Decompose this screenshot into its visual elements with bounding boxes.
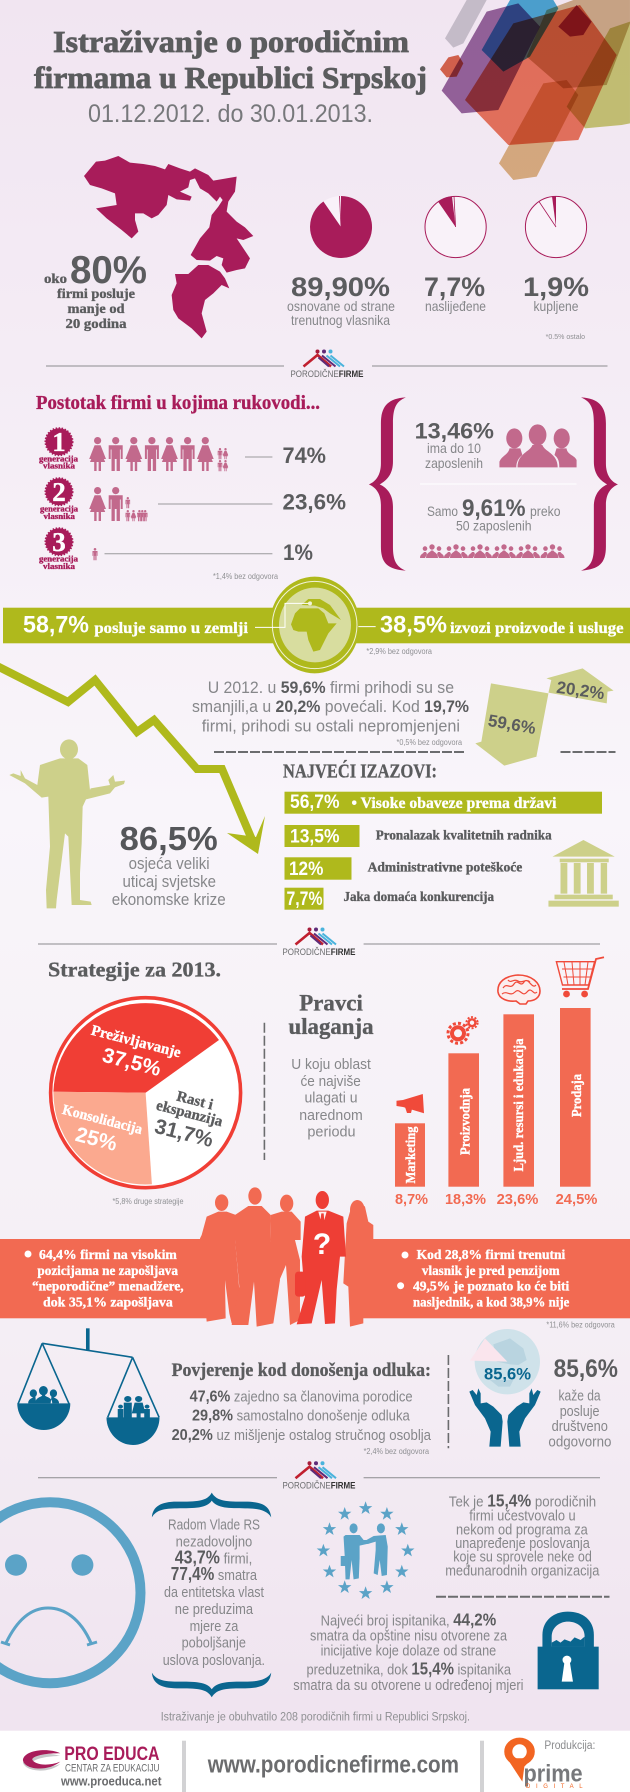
- title: [34, 24, 427, 128]
- icon: scales: [17, 1328, 160, 1445]
- pie chart: strategies: Rast i: [175, 1089, 215, 1113]
- footer panel: [0, 1731, 630, 1792]
- decorative colored cubes: [440, 0, 630, 180]
- text: government satisfaction: poboljšanje: [182, 1635, 246, 1652]
- logo: Pro Educa: www.proeduca.net: [60, 1775, 162, 1789]
- stat: 86,5% crisis impact: 86,5%: [120, 820, 218, 857]
- text: government satisfaction: da entitetska vlast: [164, 1584, 265, 1601]
- text: investment directions: [288, 991, 374, 1141]
- logo: Prime Digital: DIGITAL: [526, 1784, 583, 1790]
- stat: 80% under 20 years: firmi posluje: [57, 287, 135, 302]
- pie chart: strategies: 37,5%: [100, 1044, 164, 1081]
- logo: Prime Digital: prime: [524, 1761, 583, 1788]
- text: investment directions: će najviše: [300, 1073, 361, 1090]
- curly brace: bottom: [152, 1673, 271, 1697]
- divider with logo 3: PORODIČNEFIRME: [282, 1481, 356, 1492]
- pie chart: strategies: [51, 998, 241, 1188]
- text: investment directions: narednom: [299, 1107, 363, 1124]
- row: second generation: generacija: [40, 504, 79, 514]
- band: domestic vs export: izvozi proizvode i usluge: [450, 620, 624, 637]
- text: municipalities openness: inicijative koje dolaze od strane: [321, 1643, 496, 1660]
- bar: 13,5%: [284, 825, 552, 848]
- bar: Proizvodnja: Proizvodnja: [458, 1088, 474, 1155]
- text: municipalities openness: [293, 1610, 524, 1694]
- stat: 13,46% up to 10 employees: ima do 10: [427, 440, 481, 456]
- text: government satisfaction: ne preduzima: [175, 1601, 254, 1618]
- bar: Proizvodnja: [445, 1053, 486, 1208]
- row: third generation: 1%: [283, 540, 313, 565]
- text: owner retirement and successor: nasljednik, a kod 38,9% nije: [413, 1296, 569, 1311]
- row: third generation: 3: [52, 527, 66, 557]
- band: domestic vs export: 38,5%: [380, 612, 447, 639]
- website URL: www.porodicnefirme.com: [207, 1752, 459, 1779]
- icon: shopping cart: [556, 957, 604, 997]
- text: trust in decision making: 20,2% uz mišljenje ostalog stručnog osoblja: [172, 1427, 432, 1444]
- footnote: no answer 11,6%: *11,6% bez odgovora: [546, 1320, 615, 1329]
- pie chart: strategies: Konsolidacija: [61, 1102, 145, 1138]
- bar: 13,5%: 13,5%: [290, 827, 340, 848]
- stat: 9,61% over 50 employees: Samo: [427, 503, 458, 519]
- text: non-family managers: 64,4% firmi na visokim: [39, 1248, 177, 1263]
- text: investment directions: U koju oblast: [291, 1056, 372, 1073]
- divider with logo 3: [38, 1461, 600, 1492]
- pie: 7,7%: naslijeđene: [425, 298, 486, 314]
- bar: Prodaja: Prodaja: [570, 1074, 585, 1117]
- icon: padlock: [538, 1612, 599, 1689]
- text: survey scope: Istraživanje je obuhvatilo 208 porodičnih firmi u Republici Srpskoj.: [161, 1712, 470, 1724]
- stat: 85,6% socially responsible: [548, 1355, 618, 1451]
- text: investment directions: ulagati u: [304, 1090, 358, 1107]
- arrow: falling trend line: [0, 666, 265, 854]
- row: first generation: vlasnika: [43, 461, 76, 471]
- pie: 89,90%: [287, 196, 395, 328]
- text: international programs: međunarodnih organizacija: [445, 1562, 600, 1579]
- pie: 89,90%: osnovane od strane: [287, 298, 395, 314]
- text: revenue change: U 2012. u 59,6% firmi prihodi su se: [208, 678, 454, 697]
- text: trust in decision making: Povjerenje kod donošenja odluka:: [172, 1360, 431, 1381]
- text: owner retirement and successor: 49,5% je poznato ko će biti: [413, 1280, 569, 1295]
- arrows: revenue down and up: 59,6%: [487, 711, 537, 738]
- logo: Pro Educa: CENTAR ZA EDUKACIJU: [65, 1763, 160, 1775]
- text: government satisfaction: mjere za: [190, 1618, 239, 1635]
- text: revenue change: [192, 678, 469, 747]
- text: international programs: unapređenje poslovanja: [455, 1535, 590, 1552]
- band: domestic vs export: [3, 608, 630, 643]
- pie: 1,9%: kupljene: [534, 298, 579, 314]
- divider with logo 1: [46, 350, 608, 380]
- silhouettes: group of people: [200, 1187, 373, 1327]
- curly brace: top: [152, 1493, 271, 1517]
- text: investment directions: ulaganja: [288, 1014, 374, 1039]
- map of Republika Srpska: [84, 156, 253, 338]
- logo: Pro Educa: PRO EDUCA: [64, 1744, 160, 1765]
- text: trust in decision making: *2,4% bez odgovora: [364, 1447, 429, 1456]
- row: second generation: vlasnika: [44, 511, 76, 521]
- band: domestic vs export: posluje samo u zemlji: [94, 620, 249, 637]
- icon: EU stars and handshake: [317, 1501, 414, 1599]
- silhouette: man shrugging: [9, 739, 125, 908]
- footnote: other strategies: *5,8% druge strategije: [112, 1197, 184, 1206]
- divider with logo 2: [38, 928, 600, 958]
- pie chart: strategies: 31,7%: [152, 1115, 216, 1152]
- footnote: other: *0.5% ostalo: [546, 332, 585, 341]
- pie: 89,90%: 89,90%: [291, 272, 390, 302]
- stat: 13,46% up to 10 employees: 13,46%: [415, 418, 494, 443]
- text: government satisfaction: Radom Vlade RS: [168, 1516, 260, 1533]
- icon: globe badge: [255, 577, 376, 673]
- icon: megaphone: [396, 1094, 424, 1113]
- stat: 13,46% up to 10 employees: [415, 418, 494, 471]
- arrows: revenue down and up: [475, 668, 614, 766]
- text: government satisfaction: uslova poslovanja.: [163, 1652, 265, 1669]
- row: second generation: 23,6%: [282, 489, 346, 514]
- logo: Pro Educa: [23, 1744, 162, 1789]
- stat: 9,61% over 50 employees: [427, 495, 561, 534]
- text: revenue change: firmi, prihodi su ostali nepromjenjeni: [202, 717, 460, 736]
- text: non-family managers: “neporodične” menadžere,: [32, 1280, 184, 1295]
- text: investment directions: Pravci: [299, 991, 363, 1016]
- text: international programs: [445, 1491, 600, 1579]
- stat: 86,5% crisis impact: osjeća veliki: [129, 854, 210, 873]
- title: Istraživanje o porodičnim: [53, 24, 409, 59]
- bar: 7,7%: 7,7%: [286, 889, 323, 910]
- stat: 80% under 20 years: oko: [44, 272, 67, 287]
- bar: 12%: 12%: [289, 859, 323, 880]
- text: owner retirement and successor: [397, 1248, 569, 1311]
- icon: brain: [498, 975, 540, 1004]
- row: first generation: generacija: [39, 454, 79, 464]
- bar: Prodaja: 24,5%: [556, 1191, 597, 1208]
- stat: 80% under 20 years: 80%: [70, 249, 147, 292]
- text: municipalities openness: Najveći broj ispitanika, 44,2%: [321, 1610, 497, 1630]
- stat: 9,61% over 50 employees: preko: [530, 503, 561, 519]
- bar: Ljud. resursi i edukacija: [497, 1014, 538, 1208]
- logo: Prime Digital: Produkcija:: [544, 1740, 595, 1752]
- text: non-family managers: dok 35,1% zapošljava: [43, 1296, 173, 1311]
- bar: Proizvodnja: 18,3%: [445, 1191, 486, 1208]
- bar: 7,7%: [284, 888, 494, 910]
- arrows: revenue down and up: 20,2%: [555, 678, 606, 703]
- text: municipalities openness: smatra da su otvorene u određenoj mjeri: [293, 1677, 524, 1694]
- text: government satisfaction: 77,4% smatra: [171, 1564, 258, 1584]
- row: second generation: 2: [52, 477, 66, 507]
- text: government satisfaction: 43,7% firmi,: [175, 1547, 252, 1567]
- icon: row of small people: [420, 544, 564, 558]
- text: international programs: firmi učestvovalo u: [469, 1508, 576, 1525]
- text: non-family managers: [24, 1248, 184, 1311]
- stat: 13,46% up to 10 employees: zaposlenih: [425, 455, 483, 471]
- bar: 12%: [284, 857, 522, 880]
- band: management and succession: [0, 1239, 630, 1318]
- stat: 80% under 20 years: 20 godina: [66, 317, 126, 332]
- title: 01.12.2012. do 30.01.2013.: [88, 100, 373, 128]
- footnote: no answer 2,9%: *2,9% bez odgovora: [366, 647, 432, 656]
- logo: Prime Digital: [507, 1740, 595, 1790]
- text: revenue change: smanjili,a u 20,2% povećali. Kod 19,7%: [192, 697, 469, 716]
- stat: 85,6% socially responsible: posluje: [560, 1403, 600, 1420]
- pie chart: strategies: Preživljavanje: [89, 1023, 183, 1061]
- icon: government building: [548, 840, 619, 907]
- row: first generation: 1: [52, 427, 66, 457]
- text: trust in decision making: [172, 1360, 432, 1456]
- pie: 7,7%: [424, 196, 486, 314]
- band: domestic vs export: 58,7%: [23, 612, 89, 639]
- divider with logo 1: PORODIČNEFIRME: [290, 369, 364, 380]
- stat: 86,5% crisis impact: uticaj svjetske: [122, 872, 216, 891]
- stat: 86,5% crisis impact: ekonomske krize: [112, 890, 226, 909]
- bar: 7,7%: Jaka domaća konkurencija: [344, 890, 494, 905]
- row: third generation: generacija: [39, 554, 79, 564]
- curly braces: [369, 397, 618, 571]
- stat: 85,6% socially responsible: odgovorno: [548, 1434, 612, 1451]
- stat: 9,61% over 50 employees: 9,61%: [462, 495, 526, 522]
- stat: 85,6% socially responsible: društveno: [552, 1418, 608, 1435]
- stat: 9,61% over 50 employees: 50 zaposlenih: [456, 518, 532, 534]
- heading: strategies: Strategije za 2013.: [48, 958, 221, 982]
- icon: three people: [499, 424, 577, 467]
- text: owner retirement and successor: vlasnik je pred penzijom: [422, 1264, 560, 1279]
- stat: 80% under 20 years: [44, 249, 147, 332]
- text: international programs: nekom od programa za: [456, 1521, 588, 1538]
- bar: Marketing: Marketing: [404, 1126, 419, 1184]
- bar: 56,7%: 56,7%: [290, 792, 340, 813]
- text: trust in decision making: 47,6% zajedno sa članovima porodice: [190, 1389, 413, 1406]
- bar: Marketing: [395, 1123, 428, 1208]
- bar: Marketing: 8,7%: [395, 1191, 428, 1208]
- bar: 56,7%: [284, 792, 602, 814]
- pie chart: strategies: ekspanzija: [154, 1098, 225, 1130]
- text: investment directions: periodu: [307, 1124, 356, 1141]
- pie: 7,7%: 7,7%: [424, 272, 485, 302]
- pie: 89,90%: trenutnog vlasnika: [291, 312, 390, 328]
- text: international programs: koje su sprovele neke od: [453, 1549, 592, 1566]
- pie: 1,9%: 1,9%: [523, 272, 589, 302]
- bar: Ljud. resursi i edukacija: Ljud. resursi i edukacija: [512, 1038, 527, 1172]
- heading: leadership by generation: Postotak firmi u kojima rukovodi...: [36, 392, 320, 414]
- text: owner retirement and successor: Kod 28,8% firmi trenutni: [417, 1248, 565, 1263]
- pie: 1,9%: [523, 196, 589, 314]
- row: third generation: [39, 527, 313, 571]
- row: third generation: vlasnika: [43, 561, 76, 571]
- bar: 12%: Administrativne poteškoće: [368, 861, 522, 876]
- icon: sad face: [0, 1502, 140, 1683]
- stat: 80% under 20 years: manje od: [68, 302, 125, 317]
- text: municipalities openness: smatra da opštine nisu otvorene za: [310, 1628, 508, 1645]
- bar: Prodaja: [556, 1008, 597, 1208]
- text: government satisfaction: [163, 1516, 265, 1669]
- text: trust in decision making: 29,8% samostalno donošenje odluka: [192, 1408, 411, 1425]
- row: first generation: 74%: [282, 443, 326, 468]
- stat: 85,6% socially responsible: 85,6%: [554, 1355, 618, 1383]
- icon: globe pie in hands: 85,6%: [484, 1364, 531, 1383]
- heading: biggest challenges: NAJVEĆI IZAZOVI:: [283, 759, 437, 783]
- icon: globe pie in hands: [469, 1329, 541, 1447]
- text: non-family managers: pozicijama ne zapošljava: [37, 1264, 178, 1279]
- bar: 13,5%: Pronalazak kvalitetnih radnika: [376, 828, 552, 843]
- divider with logo 2: PORODIČNEFIRME: [282, 947, 356, 958]
- title: firmama u Republici Srpskoj: [34, 60, 427, 95]
- text: municipalities openness: preduzetnika, dok 15,4% ispitanika: [306, 1659, 512, 1679]
- bar: 56,7%: • Visoke obaveze prema državi: [352, 795, 557, 812]
- text: international programs: Tek je 15,4% porodičnih: [449, 1491, 596, 1511]
- bar: Ljud. resursi i edukacija: 23,6%: [497, 1191, 538, 1208]
- footnote: no answer 1,4%: *1,4% bez odgovora: [213, 572, 278, 581]
- pie chart: strategies: 25%: [73, 1123, 120, 1156]
- row: second generation: [40, 477, 346, 521]
- text: revenue change: *0,5% bez odgovora: [396, 738, 462, 747]
- text: government satisfaction: nezadovoljno: [176, 1534, 252, 1551]
- question mark: ?: [313, 1228, 331, 1261]
- stat: 86,5% crisis impact: [112, 820, 226, 909]
- icon: gears: [448, 1017, 478, 1043]
- stat: 85,6% socially responsible: kaže da: [558, 1388, 601, 1405]
- row: first generation: [39, 427, 326, 471]
